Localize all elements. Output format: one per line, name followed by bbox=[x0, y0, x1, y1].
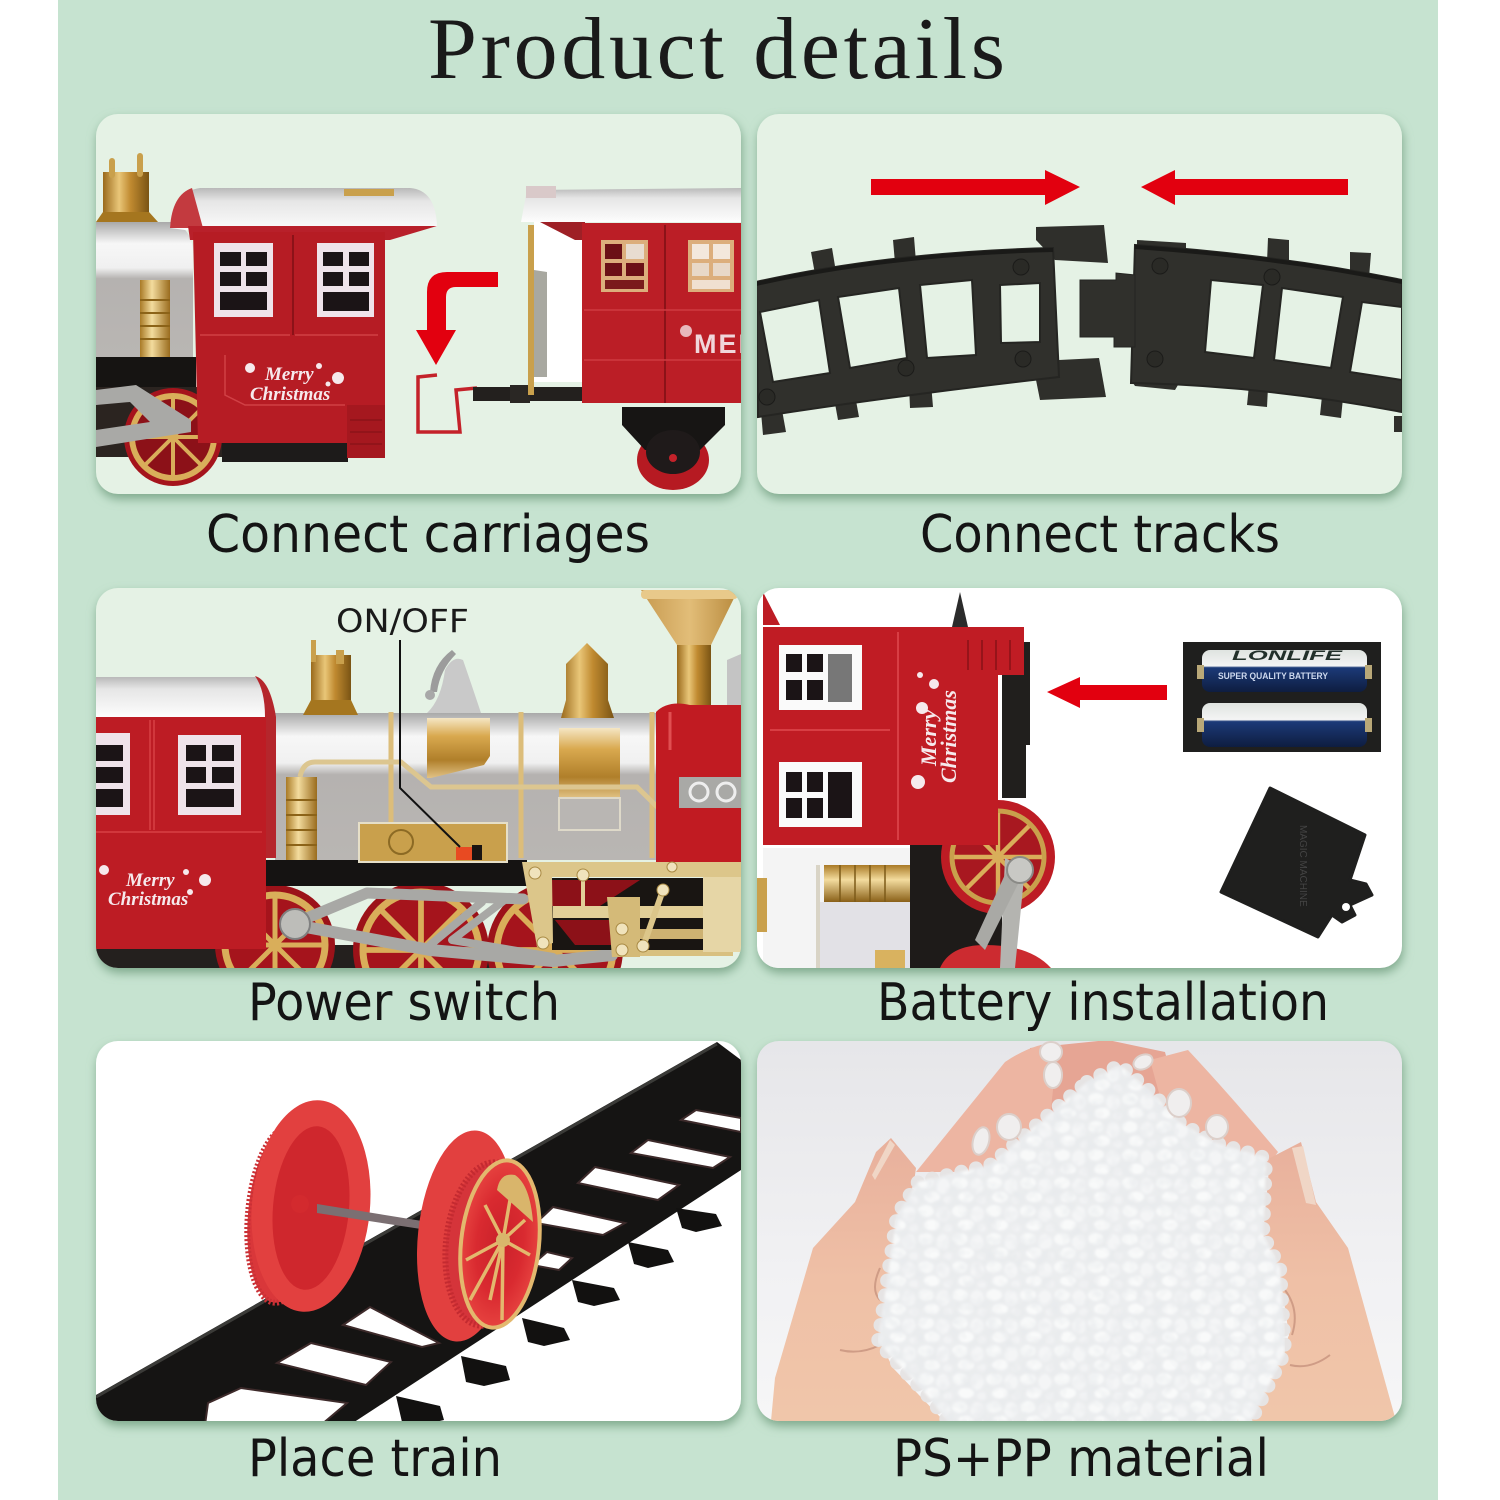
label: power switch: Power switch bbox=[248, 973, 560, 1033]
hands bbox=[771, 1040, 1396, 1421]
arrow: right bbox=[871, 170, 1080, 205]
straight track bbox=[96, 1042, 741, 1430]
plastic pellet pile bbox=[878, 1065, 1285, 1421]
panel: connect carriages bbox=[96, 114, 748, 499]
on/off label: ON/OFF bbox=[336, 602, 469, 640]
panel: material bbox=[757, 1040, 1403, 1426]
arrow: left bbox=[1141, 170, 1348, 205]
domes, bell and funnel bbox=[303, 590, 741, 718]
cab: Christmas bbox=[108, 889, 188, 910]
locomotive bbox=[96, 153, 437, 486]
battery cover: MAGIC MACHINE bbox=[1297, 825, 1308, 907]
wheelset bbox=[240, 1095, 548, 1346]
cab windows bbox=[214, 243, 374, 317]
label: connect tracks: Connect tracks bbox=[920, 505, 1280, 565]
gold battery box and switch bbox=[359, 823, 507, 862]
gold valve gear bbox=[522, 862, 741, 957]
red smokebox bbox=[656, 704, 741, 862]
coupling outline bbox=[418, 375, 477, 432]
label: battery installation: Battery installation bbox=[877, 973, 1329, 1033]
left track section bbox=[756, 225, 1108, 435]
rotated lettering: Christmas bbox=[936, 690, 961, 783]
panel: place train bbox=[96, 1041, 742, 1430]
near wheel bbox=[417, 1130, 542, 1342]
grey connecting rod bbox=[295, 893, 612, 961]
battery holder bbox=[1183, 642, 1381, 752]
panel: connect tracks bbox=[756, 114, 1403, 499]
wheels bbox=[96, 886, 623, 968]
battery holder: SUPER QUALITY BATTERY bbox=[1218, 671, 1328, 681]
carriage bbox=[473, 186, 748, 490]
rotated lettering bbox=[911, 672, 961, 789]
arrow: down into coupling bbox=[416, 272, 498, 365]
axle bbox=[317, 1204, 422, 1229]
panel: battery installation bbox=[757, 588, 1403, 973]
gold straps bbox=[286, 712, 656, 860]
title: Product details bbox=[428, 1, 1005, 98]
label: place train: Place train bbox=[248, 1429, 502, 1489]
locomotive side view bbox=[96, 590, 741, 968]
boiler bbox=[275, 713, 656, 860]
on/off leader line bbox=[400, 640, 460, 847]
panel: power switch bbox=[96, 588, 742, 1018]
label: connect carriages: Connect carriages bbox=[206, 505, 650, 565]
locomotive rear view bbox=[757, 592, 1055, 968]
cab: Merry bbox=[125, 870, 175, 891]
rotated lettering: Merry bbox=[916, 710, 941, 767]
cab bbox=[96, 676, 276, 949]
far wheel bbox=[244, 1100, 370, 1312]
carriage wheel bbox=[622, 407, 725, 490]
cab lettering bbox=[245, 363, 344, 400]
cab lettering: Merry bbox=[264, 364, 314, 385]
battery holder: LONLIFE bbox=[1232, 647, 1343, 663]
loose pellets bbox=[970, 1042, 1228, 1157]
carriage lettering: MEI bbox=[694, 329, 748, 359]
carriage windows bbox=[601, 240, 734, 292]
right track section bbox=[1080, 238, 1402, 432]
arrow: into battery bay bbox=[1047, 677, 1167, 708]
label: material: PS+PP material bbox=[893, 1429, 1269, 1489]
battery cover bbox=[1221, 788, 1372, 937]
cab lettering: Christmas bbox=[250, 384, 330, 405]
